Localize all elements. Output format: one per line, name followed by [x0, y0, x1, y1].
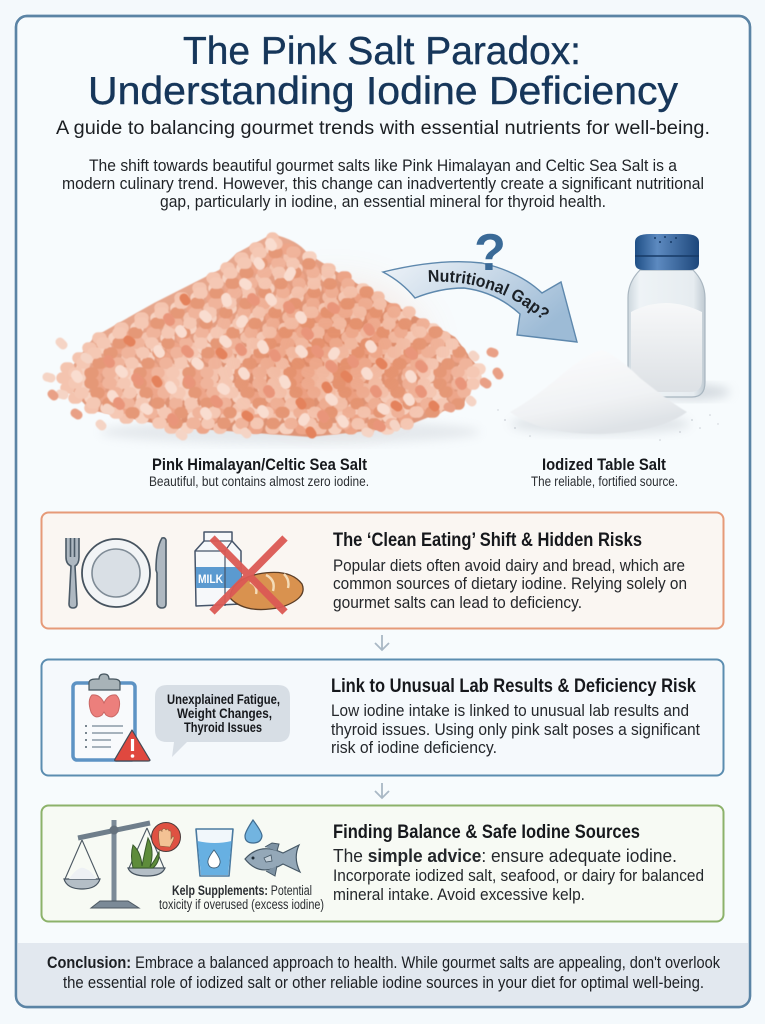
body text: risk of iodine deficiency.	[331, 738, 497, 757]
heading: Link to Unusual Lab Results & Deficiency Risk	[331, 675, 696, 697]
icon: plate and cutlery	[66, 538, 166, 608]
panel: clean eating	[42, 512, 724, 628]
title: The Pink Salt Paradox:	[183, 30, 581, 73]
caption: kelp supplements: toxicity if overused (excess iodine)	[159, 897, 324, 912]
label: pink salt: Beautiful, but contains almost zero iodine.	[149, 474, 369, 489]
body text: thyroid issues. Using only pink salt poses a significant	[331, 720, 700, 739]
icon: balance scale	[64, 820, 165, 908]
intro text	[62, 157, 704, 211]
label: iodized salt: The reliable, fortified source.	[531, 474, 678, 489]
arrow: down 2	[375, 783, 389, 798]
icon: fish	[245, 843, 300, 876]
intro text: gap, particularly in iodine, an essential mineral for thyroid health.	[160, 193, 606, 211]
body text: common sources of dietary iodine. Relying solely on	[333, 574, 687, 593]
icon: glass of water	[196, 829, 233, 876]
label: iodized salt: Iodized Table Salt	[542, 456, 666, 474]
body text: Incorporate iodized salt, seafood, or dairy for balanced	[333, 866, 704, 885]
callout: symptoms: Unexplained Fatigue,	[167, 692, 280, 707]
icon: clipboard with thyroid	[73, 674, 150, 761]
arrow: nutritional gap: Nutritional Gap?	[428, 270, 549, 318]
body text: gourmet salts can lead to deficiency.	[333, 593, 582, 612]
arrow: down 1	[375, 635, 389, 650]
conclusion band: the essential role of iodized salt or other reliable iodine sources in your diet for optimal well-being.	[63, 974, 704, 992]
warm shading	[250, 290, 420, 410]
intro text: The shift towards beautiful gourmet salts like Pink Himalayan and Celtic Sea Salt is a	[89, 157, 678, 175]
arrow: nutritional gap	[381, 261, 578, 343]
body text	[333, 846, 704, 904]
icon: milk carton: MILK	[198, 572, 223, 586]
icon: question mark: ?	[474, 224, 506, 282]
illustration: pink salt pile	[47, 234, 499, 444]
callout: symptoms: Thyroid Issues	[184, 720, 262, 735]
body text: mineral intake. Avoid excessive kelp.	[333, 885, 585, 904]
heading: Finding Balance & Safe Iodine Sources	[333, 821, 640, 843]
label: iodized salt	[531, 456, 678, 489]
panel: lab results	[42, 660, 724, 776]
illustration: salt shaker	[628, 234, 730, 400]
callout: symptoms	[155, 685, 290, 757]
icon: water drop	[245, 820, 262, 843]
body text: Popular diets often avoid dairy and bread, which are	[333, 556, 685, 575]
body text: Low iodine intake is linked to unusual lab results and	[331, 701, 689, 720]
caption: kelp supplements	[159, 883, 324, 912]
label: pink salt	[149, 456, 369, 489]
icon: milk carton	[195, 532, 241, 606]
title: Understanding Iodine Deficiency	[88, 70, 679, 113]
label: pink salt: Pink Himalayan/Celtic Sea Salt	[152, 456, 367, 474]
body text: The simple advice: ensure adequate iodine.	[333, 846, 677, 866]
body text	[333, 556, 687, 612]
callout: symptoms: Weight Changes,	[177, 706, 272, 721]
title	[88, 30, 679, 113]
icon: red cross	[212, 538, 285, 612]
caption: kelp supplements: Kelp Supplements: Potential	[172, 883, 312, 898]
icon: bread	[230, 572, 303, 610]
heading: The ‘Clean Eating’ Shift & Hidden Risks	[333, 529, 642, 551]
icon: stop hand	[152, 822, 180, 852]
intro text: modern culinary trend. However, this change can inadvertently create a significant nutritional	[62, 175, 704, 193]
panel: finding balance	[42, 806, 724, 922]
illustration: white salt pile	[497, 350, 719, 441]
body text	[331, 701, 700, 757]
subtitle: A guide to balancing gourmet trends with essential nutrients for well-being.	[56, 117, 710, 139]
